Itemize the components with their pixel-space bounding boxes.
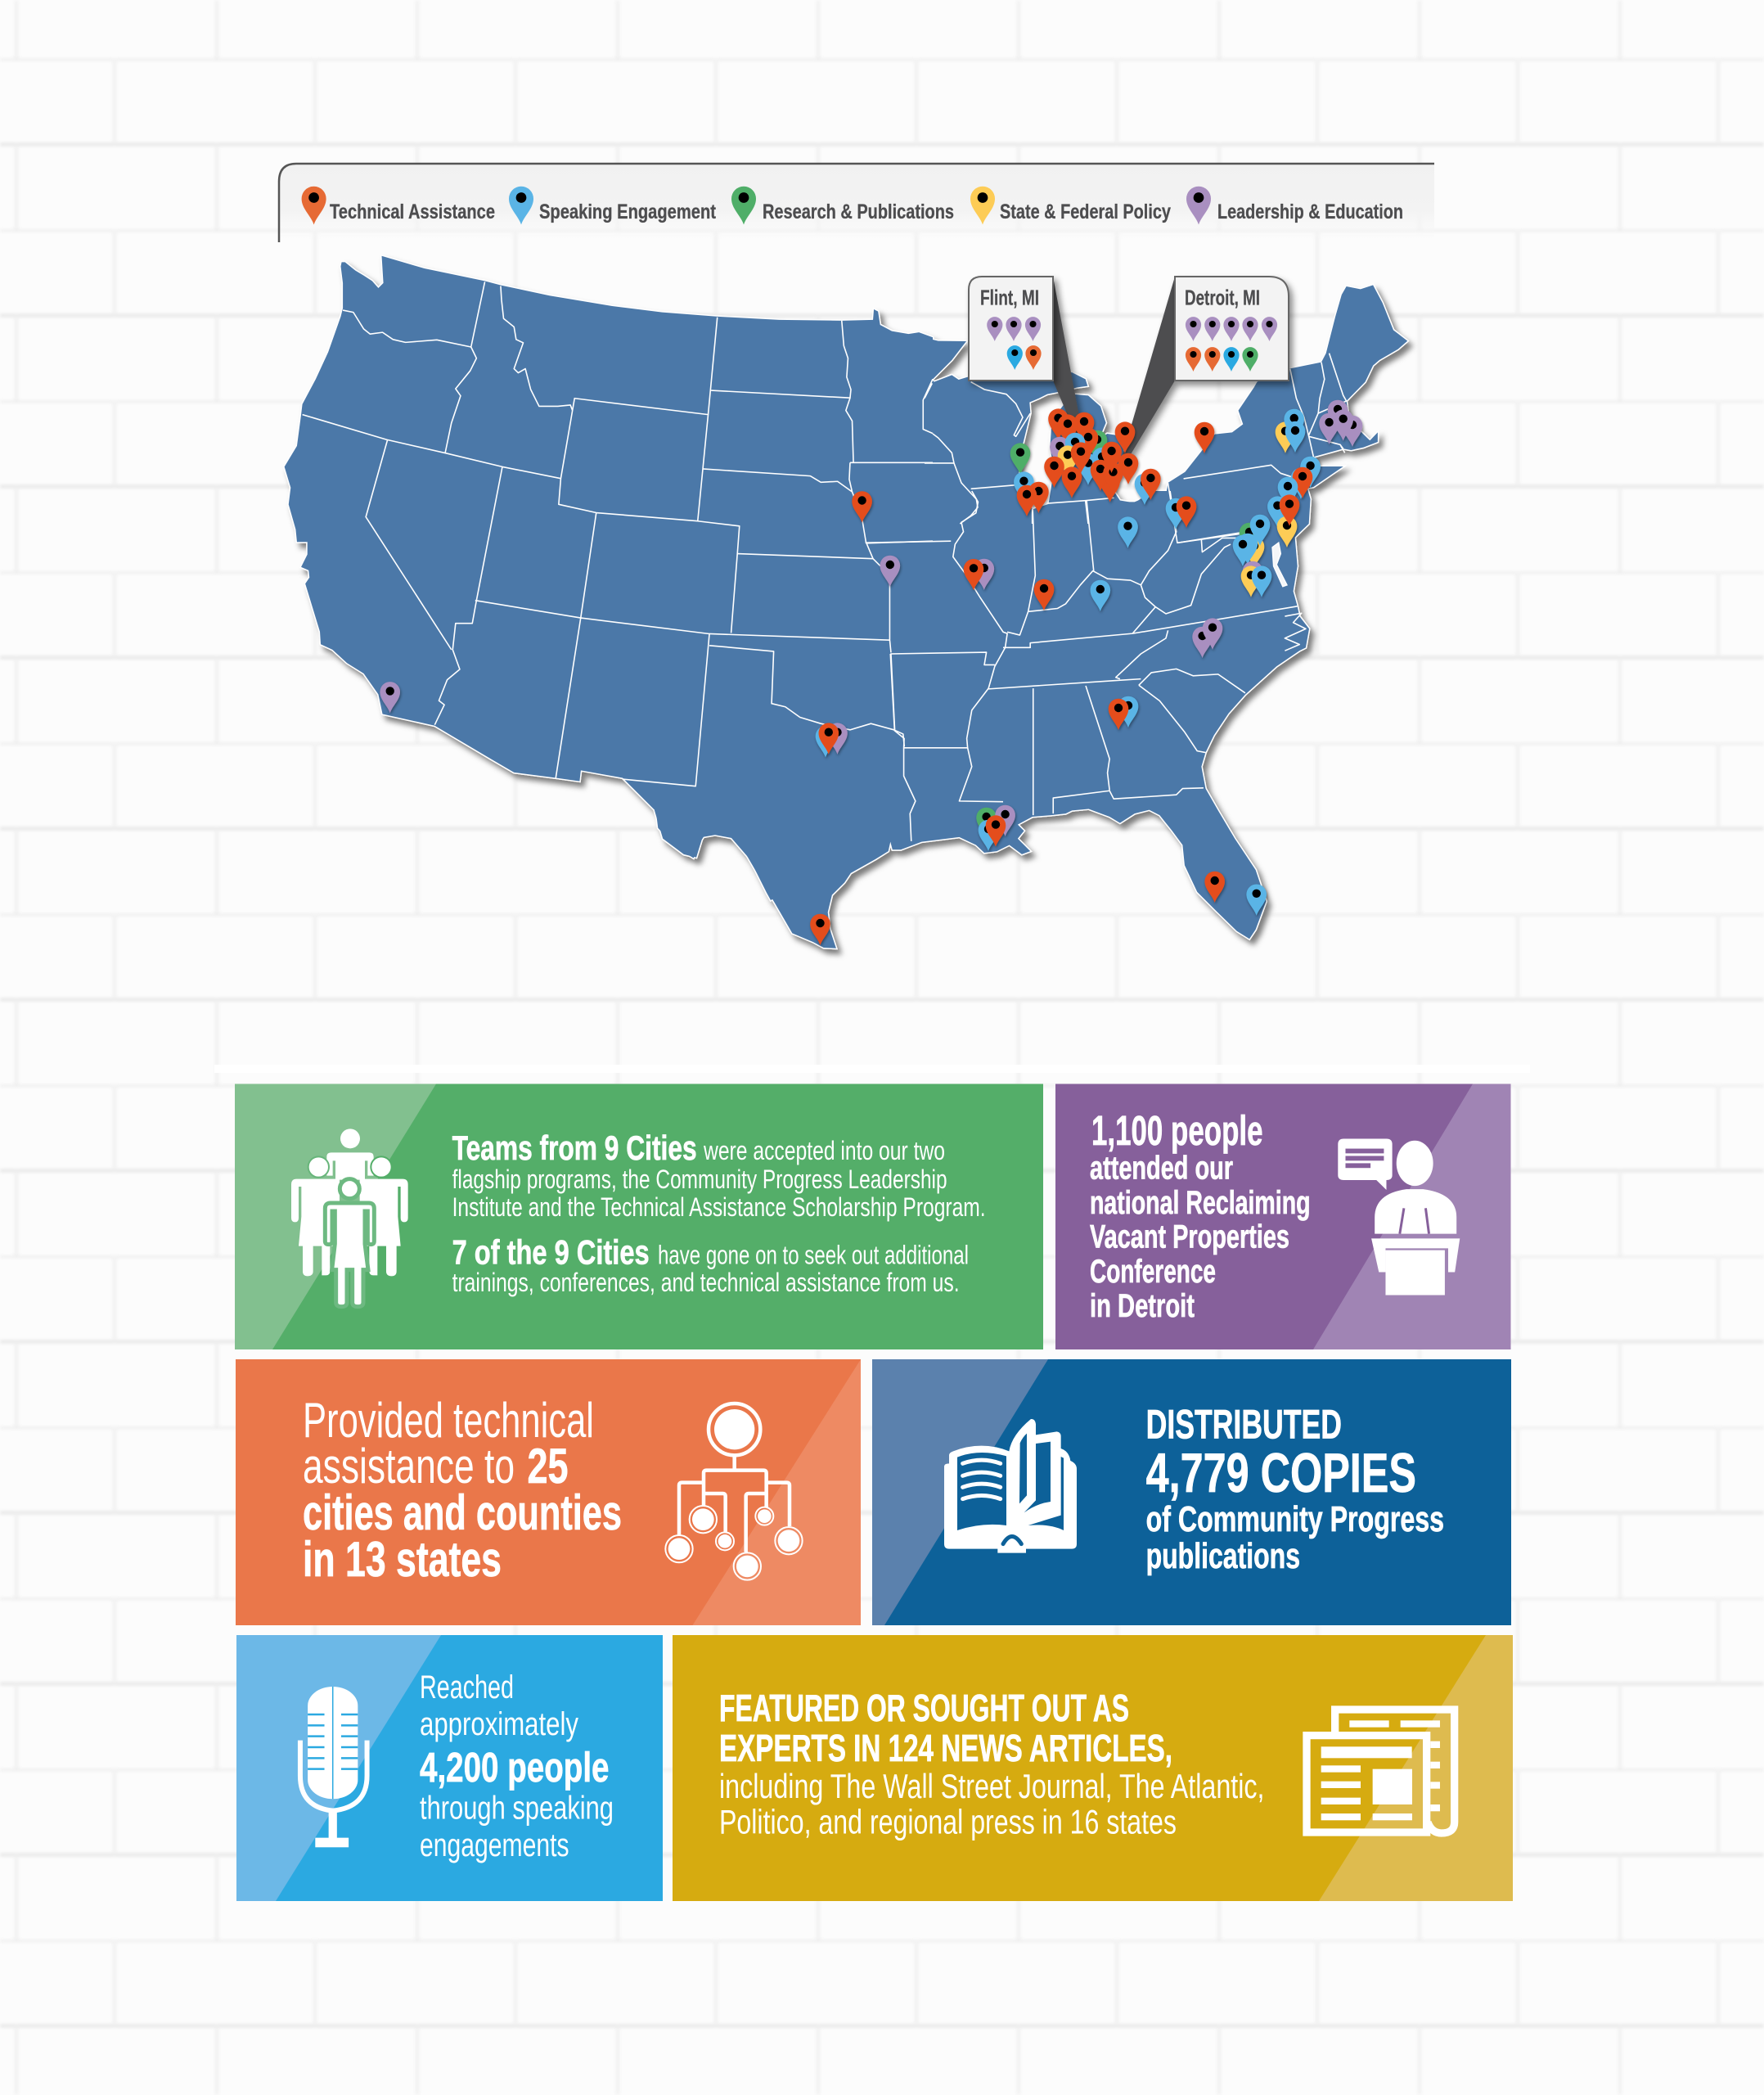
- legend item: leadership and education: Leadership & Education: [1217, 200, 1403, 223]
- text: technical assistance reach: in 13 states: [303, 1532, 502, 1587]
- text: technical assistance reach: Provided technical: [303, 1393, 594, 1448]
- icon: network hierarchy: [665, 1403, 803, 1580]
- text: technical assistance reach: [303, 1393, 622, 1587]
- text: teams from 9 cities: flagship programs, the Community Progress Leadership: [452, 1165, 947, 1194]
- text: conference attendance: in Detroit: [1090, 1288, 1195, 1324]
- callout: Flint, MI: Flint, MI: [980, 286, 1039, 310]
- text: publications distributed: 4,779 COPIES: [1146, 1442, 1416, 1504]
- legend item: research and publications: [731, 187, 954, 224]
- callout pointer: Detroit: [1115, 277, 1175, 480]
- map pins: [380, 400, 1362, 945]
- text: teams from 9 cities: [452, 1129, 986, 1297]
- text: publications distributed: of Community Progress: [1146, 1499, 1444, 1539]
- text: speaking reach: approximately: [420, 1706, 578, 1742]
- icon: speaker at podium: [1338, 1139, 1460, 1295]
- legend item: speaking engagement: Speaking Engagement: [539, 200, 717, 223]
- legend item: leadership and education: [1186, 187, 1403, 224]
- text: speaking reach: engagements: [420, 1827, 569, 1863]
- icon: group of people: [291, 1129, 408, 1307]
- text: publications distributed: publications: [1146, 1536, 1300, 1576]
- callout: Detroit, MI: [1175, 277, 1289, 381]
- panel: speaking engagements (light blue): [236, 1635, 663, 1901]
- callout pointer: Flint: [1053, 277, 1088, 464]
- text: news coverage: EXPERTS IN 124 NEWS ARTICLES,: [719, 1727, 1172, 1769]
- text: news coverage: including The Wall Street Journal, The Atlantic,: [719, 1767, 1265, 1805]
- text: news coverage: Politico, and regional press in 16 states: [719, 1803, 1177, 1841]
- text: speaking reach: 4,200 people: [420, 1744, 609, 1791]
- panel: news articles (gold): [673, 1635, 1513, 1901]
- legend item: speaking engagement: [509, 187, 717, 224]
- legend item: state and federal policy: [970, 187, 1171, 224]
- panel: distributed copies (dark blue): [872, 1359, 1511, 1625]
- text: speaking reach: Reached: [420, 1669, 514, 1705]
- legend item: technical assistance: Technical Assistance: [330, 200, 495, 223]
- text: conference attendance: national Reclaiming: [1090, 1185, 1311, 1221]
- panel: technical assistance (orange): [236, 1359, 861, 1625]
- text: teams from 9 cities: trainings, conferences, and technical assistance from us.: [452, 1268, 960, 1297]
- text: conference attendance: [1090, 1107, 1311, 1324]
- text: teams from 9 cities: 7 of the 9 Cities: [452, 1233, 650, 1272]
- legend item: technical assistance: [302, 187, 495, 224]
- text: teams from 9 cities: Institute and the Technical Assistance Scholarship Program.: [452, 1192, 986, 1222]
- legend item: state and federal policy: State & Federal Policy: [1000, 200, 1171, 223]
- text: speaking reach: through speaking: [420, 1791, 614, 1827]
- text: technical assistance reach: 25: [527, 1439, 568, 1494]
- text: conference attendance: attended our: [1090, 1151, 1233, 1187]
- text: publications distributed: DISTRIBUTED: [1146, 1402, 1342, 1448]
- icon: open book: [944, 1419, 1077, 1553]
- text: conference attendance: Vacant Properties: [1090, 1219, 1289, 1255]
- text: publications distributed: [1146, 1402, 1444, 1576]
- text: speaking reach: [420, 1669, 614, 1863]
- panel: 1,100 people (purple): [1055, 1084, 1510, 1349]
- map of the United States: [285, 256, 1407, 948]
- text: technical assistance reach: assistance to: [303, 1439, 515, 1494]
- text: teams from 9 cities: have gone on to seek out additional: [658, 1241, 969, 1270]
- legend item: research and publications: Research & Publications: [763, 200, 954, 223]
- icon: microphone: [300, 1687, 367, 1847]
- legend panel: [279, 164, 1434, 242]
- text: technical assistance reach: cities and counties: [303, 1485, 622, 1540]
- text: news coverage: [719, 1687, 1265, 1841]
- callout: Detroit, MI: Detroit, MI: [1185, 286, 1260, 310]
- icon: newspaper: [1307, 1710, 1455, 1833]
- callout: Flint, MI: [969, 277, 1053, 381]
- text: teams from 9 cities: were accepted into our two: [703, 1136, 945, 1165]
- text: teams from 9 cities: Teams from 9 Cities: [452, 1129, 697, 1167]
- text: conference attendance: 1,100 people: [1091, 1107, 1263, 1154]
- panel: teams from 9 cities (green): [235, 1084, 1043, 1349]
- text: news coverage: FEATURED OR SOUGHT OUT AS: [719, 1687, 1129, 1729]
- text: conference attendance: Conference: [1090, 1254, 1216, 1290]
